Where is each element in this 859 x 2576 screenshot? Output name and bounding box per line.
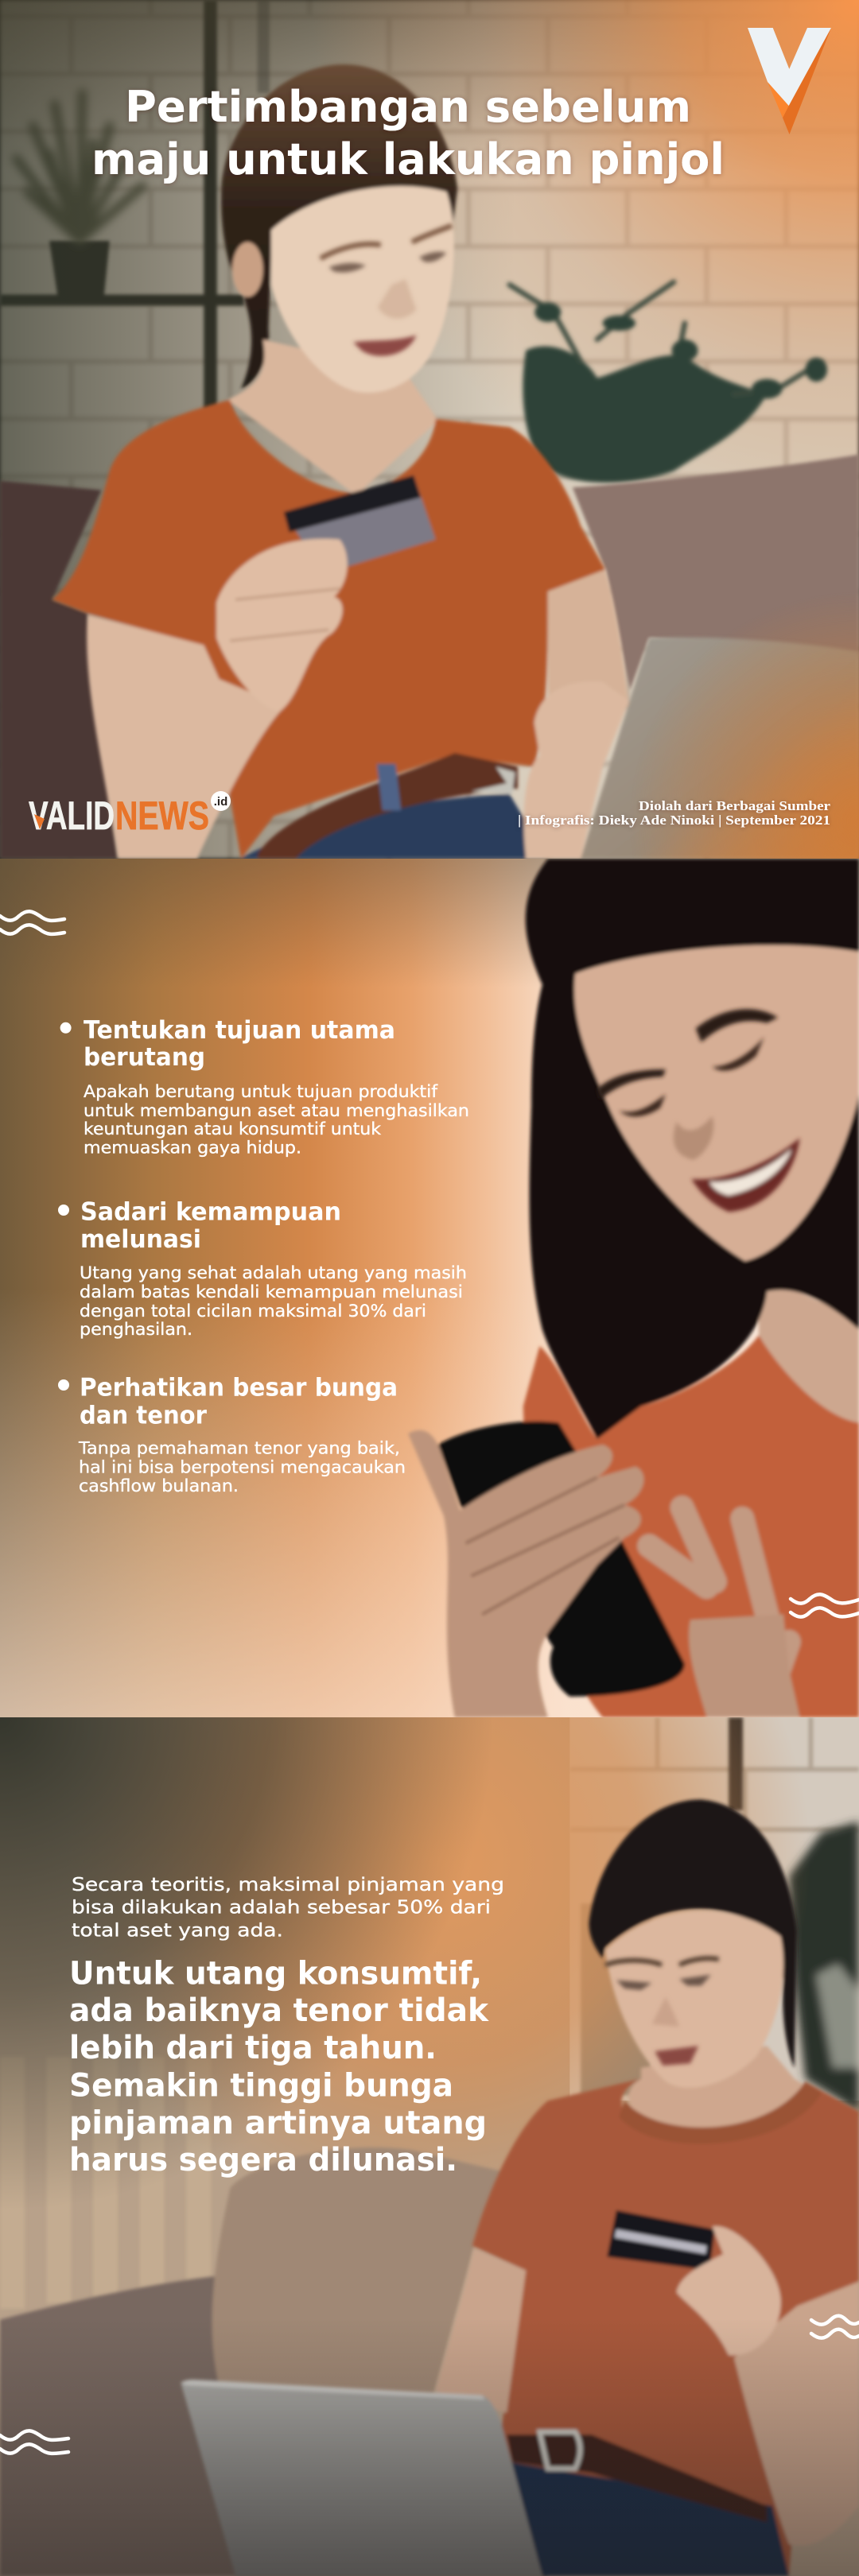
icon: V logo: [748, 28, 831, 134]
logo: VALIDNEWS: NEWS: [115, 793, 209, 838]
highlighted advice: ada baiknya tenor tidak: [69, 1992, 489, 2029]
paragraph: maximum loan: Secara teoritis, maksimal pinjaman yang: [72, 1873, 504, 1895]
face details: [321, 226, 452, 356]
tip 2: [58, 1197, 467, 1339]
tip 2: Utang yang sehat adalah utang yang masih: [80, 1263, 467, 1282]
sofa and cushion: [0, 2147, 548, 2576]
shelf: [0, 0, 270, 411]
tip 3: Tanpa pemahaman tenor yang baik,: [78, 1439, 400, 1458]
tip 1: Apakah berutang untuk tujuan produktif: [84, 1082, 438, 1101]
paragraph: maximum loan: [72, 1873, 504, 1942]
logo: VALIDNEWS: .id: [214, 795, 227, 809]
woman: [52, 64, 859, 859]
tip 2: Sadari kemampuan: [80, 1197, 341, 1226]
source credit: [518, 798, 831, 828]
decoration: wave right panel 2: [791, 1594, 859, 1617]
tip 3: dan tenor: [80, 1401, 208, 1430]
tip 1: berutang: [84, 1043, 205, 1072]
title: [91, 82, 725, 184]
radiator: [0, 2057, 211, 2309]
tip 2: penghasilan.: [80, 1320, 192, 1339]
tip 2: melunasi: [80, 1225, 201, 1254]
tip 1: Tentukan tujuan utama: [84, 1016, 395, 1045]
highlighted advice: harus segera dilunasi.: [69, 2142, 457, 2178]
panel: tips photo: [0, 859, 859, 1717]
tip 1: keuntungan atau konsumtif untuk: [84, 1119, 382, 1139]
face details: [597, 1009, 800, 1212]
colour overlays behind sofa: [0, 1717, 859, 2576]
panel: conclusion photo: [0, 1717, 859, 2576]
tip 3: hal ini bisa berpotensi mengacaukan: [79, 1458, 406, 1477]
decoration: wave left panel 3: [0, 2431, 68, 2454]
tip 1: [60, 1016, 469, 1158]
plant right: [510, 282, 827, 483]
tip 3: cashflow bulanan.: [79, 1476, 239, 1496]
corner overlay: [0, 0, 859, 859]
highlighted advice: Semakin tinggi bunga: [69, 2067, 453, 2104]
paragraph: maximum loan: bisa dilakukan adalah sebesar 50% dari: [72, 1895, 491, 1918]
title: Pertimbangan sebelum: [125, 82, 691, 132]
plant left: [17, 93, 142, 241]
tip 3: Perhatikan besar bunga: [80, 1374, 398, 1402]
wall and plant: [581, 1717, 743, 2095]
tip 2: dalam batas kendali kemampuan melunasi: [80, 1282, 463, 1302]
highlighted advice: [69, 1956, 489, 2178]
colour overlays behind figure: [0, 0, 859, 859]
decoration: wave right panel 3: [811, 2316, 859, 2338]
seated woman with card and laptop: [181, 1799, 859, 2576]
highlighted advice: Untuk utang konsumtif,: [69, 1956, 482, 1992]
tip 3: [58, 1374, 406, 1496]
highlighted advice: lebih dari tiga tahun.: [69, 2030, 437, 2066]
source credit: Diolah dari Berbagai Sumber: [639, 798, 831, 813]
source credit: | Infografis: Dieky Ade Ninoki | September 2021: [518, 813, 830, 828]
highlighted advice: pinjaman artinya utang: [69, 2105, 487, 2142]
smiling woman with phone: [408, 859, 859, 1717]
tip 2: dengan total cicilan maksimal 30% dari: [80, 1302, 426, 1321]
logo: VALIDNEWS: [29, 791, 231, 838]
tip 1: untuk membangun aset atau menghasilkan: [84, 1101, 469, 1120]
logo: VALIDNEWS: VALID: [29, 793, 115, 838]
title: maju untuk lakukan pinjol: [91, 134, 725, 184]
decoration: wave top left panel 2: [0, 911, 64, 934]
paragraph: maximum loan: total aset yang ada.: [72, 1919, 283, 1942]
face details: [605, 1958, 719, 2066]
sofa: [0, 455, 859, 859]
tip 1: memuaskan gaya hidup.: [84, 1139, 301, 1158]
